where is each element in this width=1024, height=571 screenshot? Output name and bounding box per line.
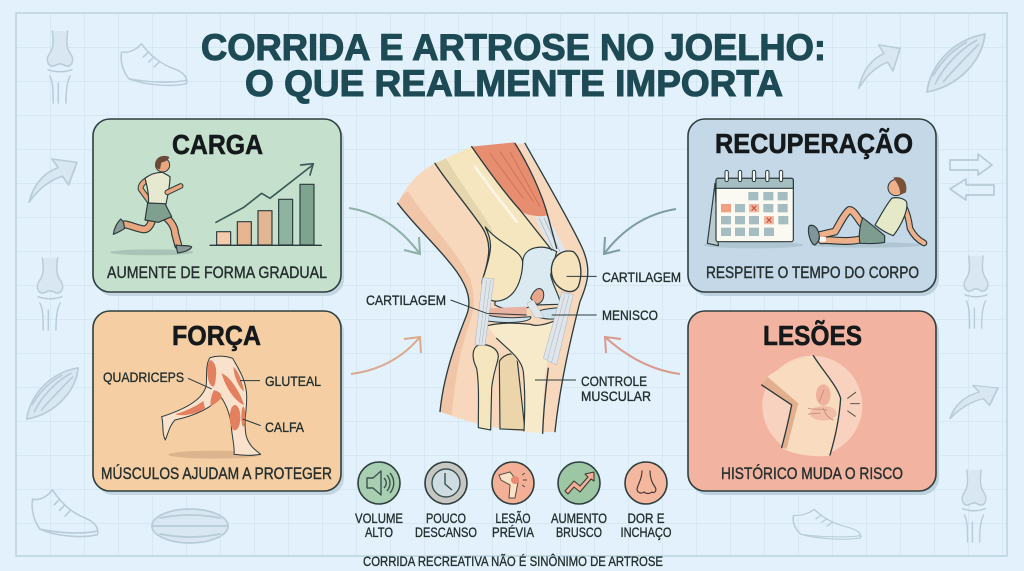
fibula (473, 345, 498, 430)
panel: forca (93, 311, 344, 495)
tendon (535, 216, 566, 254)
arrow: carga to knee (349, 208, 420, 254)
caption: carga: AUMENTE DE FORMA GRADUAL (107, 264, 327, 282)
footer note: CORRIDA RECREATIVA NÃO É SINÔNIMO DE ARTROSE (363, 553, 663, 569)
icon: pouco descanso: POUCO (426, 510, 466, 526)
icon: lesao previa: LESÃO (496, 510, 531, 526)
label: gluteal: GLUTEAL (265, 373, 321, 389)
femur (435, 147, 560, 305)
icon: leg muscles (162, 356, 262, 459)
knee label: controle muscular (581, 373, 651, 404)
knee label: cartilagem right: CARTILAGEM (602, 269, 681, 285)
heading: carga: CARGA (172, 129, 263, 160)
knee label: controle muscular: CONTROLE (581, 373, 647, 389)
icon: pouco descanso (415, 462, 477, 540)
meniscus (488, 307, 527, 317)
icon: injured knee (762, 356, 862, 456)
gap between tibia and fibula (499, 354, 525, 430)
heading: forca: FORÇA (172, 320, 261, 351)
icon: calendar (703, 170, 803, 248)
panel: carga (93, 119, 344, 296)
title: O QUE REALMENTE IMPORTA (245, 63, 783, 104)
icon: runner (110, 156, 193, 255)
ligaments (475, 278, 494, 345)
icon: aumento brusco: BRUSCO (556, 524, 602, 540)
arrow: recuperacao to knee (604, 209, 676, 254)
arrow: lesoes to knee (605, 337, 680, 374)
icon: lesao previa: PRÉVIA (492, 524, 535, 540)
knee illustration (398, 142, 597, 433)
cartilage on femur (495, 247, 560, 309)
label: calfa: CALFA (265, 419, 305, 435)
caption: lesoes: HISTÓRICO MUDA O RISCO (721, 464, 903, 483)
knee label: cartilagem left: CARTILAGEM (366, 292, 446, 308)
icon: dor e inchaco (620, 462, 672, 540)
heading: lesoes: LESÕES (763, 320, 862, 351)
knee label: menisco: MENISCO (602, 307, 658, 323)
icon: aumento brusco (551, 462, 607, 540)
icon: aumento brusco: AUMENTO (551, 510, 607, 526)
patella (551, 251, 581, 292)
icon: dor e inchaco: DOR E (628, 510, 664, 526)
icon: dor e inchaco: INCHAÇO (620, 524, 672, 540)
icon: resting person (808, 177, 924, 248)
tibia (487, 320, 556, 433)
panel: lesoes (688, 311, 939, 495)
arrow: forca to knee (351, 337, 421, 374)
panel: recuperacao (688, 119, 939, 296)
caption: forca: MÚSCULOS AJUDAM A PROTEGER (101, 464, 332, 483)
label: quadriceps: QUADRICEPS (103, 369, 184, 385)
title: CORRIDA E ARTROSE NO JOELHO: (201, 27, 826, 68)
outline (398, 143, 588, 433)
knee label: controle muscular: MUSCULAR (581, 388, 651, 404)
icon: volume alto: ALTO (365, 524, 393, 540)
quadriceps muscle (472, 142, 548, 218)
heading: recuperacao: RECUPERAÇÃO (715, 128, 913, 159)
icon: volume alto: VOLUME (355, 510, 403, 526)
icon: lesao previa (492, 462, 535, 540)
title (201, 27, 826, 104)
chart: rising bars (210, 164, 321, 245)
icon: pouco descanso: DESCANSO (415, 524, 477, 540)
icon: volume alto (355, 462, 403, 540)
skin (398, 143, 587, 432)
caption: recuperacao: RESPEITE O TEMPO DO CORPO (706, 264, 919, 282)
icon row (355, 462, 672, 540)
